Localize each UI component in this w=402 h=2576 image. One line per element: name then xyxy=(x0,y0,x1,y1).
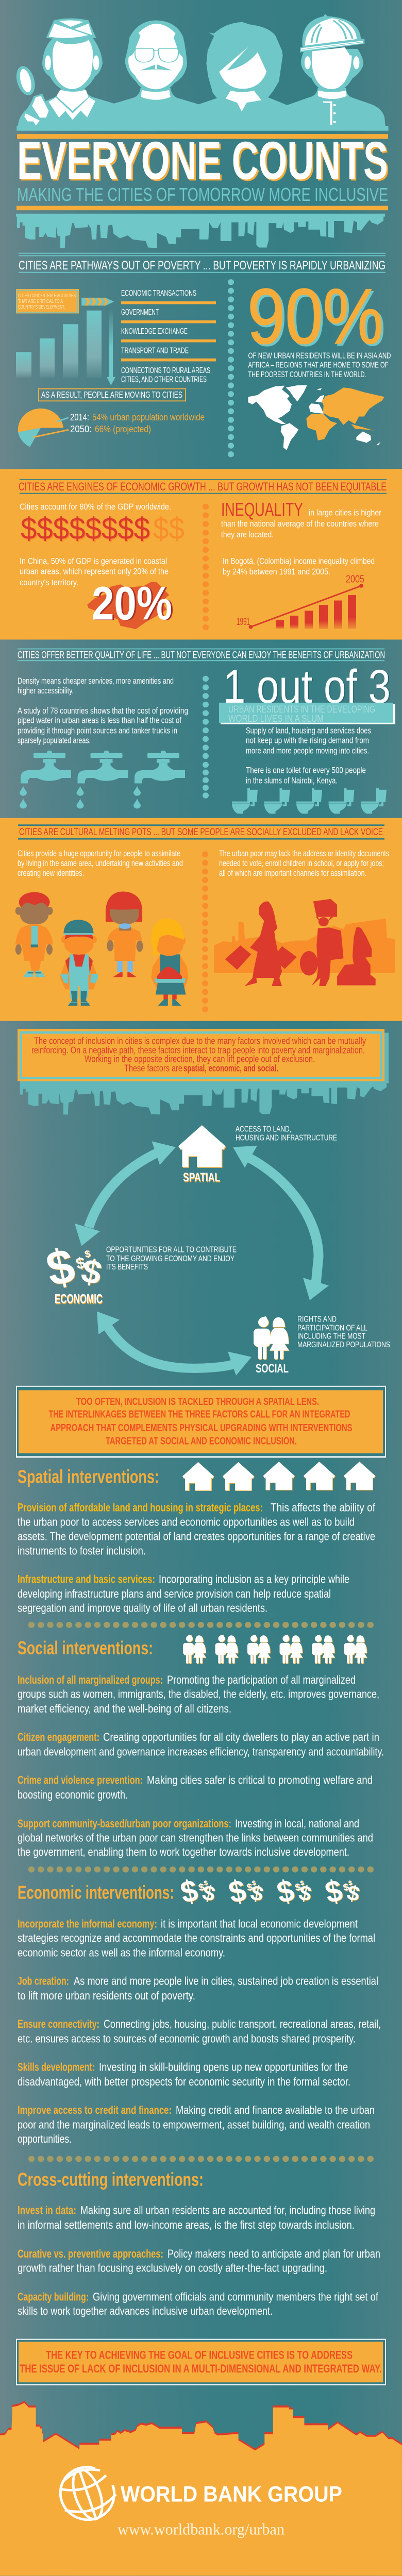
list: activities xyxy=(121,289,216,384)
text: density: sparsely populated areas. xyxy=(18,736,91,745)
text: informal economy: Incorporate the informal economy: xyxy=(18,1918,157,1930)
icons: toilets xyxy=(232,788,387,814)
text: community organizations xyxy=(18,1817,373,1858)
text: China xyxy=(20,556,169,587)
text: capacity building: Capacity building: xyxy=(18,2291,89,2303)
label: social: INCLUDING THE MOST xyxy=(297,1331,365,1341)
callout: spatial lens: TARGETED AT SOCIAL AND ECONOMIC INCLUSION. xyxy=(106,1435,297,1447)
person: man xyxy=(15,892,53,977)
website url: www.worldbank.org/urban xyxy=(118,2520,284,2538)
text: informal economy xyxy=(18,1918,375,1959)
dotted row xyxy=(31,2156,371,2162)
list: activities: KNOWLEDGE EXCHANGE xyxy=(121,327,188,336)
text: density: A study of 78 countries shows that the cost of providing xyxy=(18,706,188,716)
text: job creation: to lift more urban residents out of poverty. xyxy=(18,1990,195,2002)
text: infrastructure: segregation and improve quality of life of all urban residents. xyxy=(18,1602,267,1614)
icons: dollars: $ xyxy=(345,1880,362,1906)
text: curative vs preventive xyxy=(18,2248,380,2275)
callout: cities concentrate activities: THAT ARE CRITICAL TO A xyxy=(18,299,63,304)
illustration: diverse residents xyxy=(15,892,189,1006)
label: economic: ITS BENEFITS xyxy=(106,1262,148,1272)
text: curative vs preventive: growth rather than focusing exclusively on costly after-the-fact upgrading. xyxy=(18,2262,327,2275)
diagram: arrows xyxy=(75,1141,329,1376)
dotted divider xyxy=(228,279,234,457)
text: community organizations: Investing in local, national and xyxy=(235,1817,359,1830)
text: informal economy: it is important that local economic development xyxy=(161,1918,358,1930)
text: Bogota xyxy=(223,556,375,577)
callout: slum: WORLD LIVES IN A SLUM xyxy=(228,713,324,724)
skyline xyxy=(20,1082,387,1114)
text: new urban residents xyxy=(248,351,391,379)
text: invest in data: Invest in data: xyxy=(18,2204,76,2217)
person: woman with fringe xyxy=(206,22,283,112)
arrow: downward xyxy=(107,309,115,385)
text: credit and finance xyxy=(18,2104,375,2145)
icons: dollars: $ xyxy=(225,1873,249,1909)
icon: spatial house xyxy=(178,1125,226,1167)
text: connectivity xyxy=(18,2018,381,2045)
person: man with glasses xyxy=(125,21,187,100)
text: job creation xyxy=(18,1975,378,2002)
text: invest in data xyxy=(18,2204,375,2231)
callout: cities concentrate activities xyxy=(16,290,78,313)
icon: social couple xyxy=(254,1316,289,1360)
dotted divider xyxy=(202,851,208,1012)
text: supply and toilets: There is one toilet for every 500 people xyxy=(246,766,366,775)
illustration: excluded women and city xyxy=(214,899,395,986)
text: supply and toilets: not keep up with the rising demand from xyxy=(246,736,369,745)
callout: people moving xyxy=(39,389,186,401)
text: density: higher accessibility. xyxy=(18,686,74,696)
heading: spatial interventions: Spatial interventions: xyxy=(18,1466,159,1487)
text: marginalized groups: Inclusion of all marginalized groups: xyxy=(18,1673,163,1686)
text: supply and toilets xyxy=(246,726,371,785)
text: connectivity: Ensure connectivity: xyxy=(18,2018,99,2030)
text: infrastructure xyxy=(18,1573,349,1614)
text: density: piped water in urban areas is less than half the cost of xyxy=(18,716,181,725)
text: skills: Skills development: xyxy=(18,2061,95,2073)
icons: dollars: $ xyxy=(197,1882,206,1893)
icons: dollars: $ xyxy=(274,1873,297,1909)
icons: dollars: $ xyxy=(348,1879,353,1887)
text: infrastructure: Incorporating inclusion as a key principle while xyxy=(159,1573,349,1585)
line and bar chart: inequality 1991-2005: 1991 xyxy=(237,616,250,628)
text: infrastructure: Infrastructure and basic services: xyxy=(18,1573,155,1585)
icons: dollars: $ xyxy=(177,1873,201,1909)
label: social xyxy=(256,1314,390,1376)
icons: dollars: $ xyxy=(246,1882,254,1893)
logo text: WORLD BANK GROUP xyxy=(121,2482,342,2506)
text: China: urban areas, which represent only 20% of the xyxy=(20,567,169,576)
icons: houses xyxy=(182,1462,375,1490)
text: density: Density means cheaper services, more amenities and xyxy=(18,676,174,686)
dotted divider xyxy=(203,504,209,630)
callout: spatial lens xyxy=(16,1386,386,1458)
icons: dollars xyxy=(177,1873,362,1909)
dotted row xyxy=(31,1866,371,1873)
text: inequality: they are located. xyxy=(221,530,274,539)
pie chart: urban population: 2050: xyxy=(70,423,92,434)
logo: World Bank globe xyxy=(53,2461,122,2527)
line and bar chart: inequality 1991-2005: 2005 xyxy=(346,573,364,585)
text: citizen engagement xyxy=(18,1731,384,1758)
icons: dollars: $ xyxy=(203,1879,208,1887)
icon: economic dollars: $ xyxy=(74,1253,87,1273)
panel: melting pots xyxy=(0,818,402,1021)
icon: economic dollars: $ xyxy=(83,1248,92,1260)
text: credit and finance: opportunities. xyxy=(18,2133,72,2145)
title block xyxy=(16,130,388,210)
person: girl xyxy=(150,919,189,1006)
callout: key to inclusive cities xyxy=(16,2339,386,2385)
callout: concept of inclusion: spatial, economic, and social. xyxy=(183,1063,278,1073)
text: credit and finance: Improve access to credit and finance: xyxy=(18,2104,172,2116)
text: inequality: INEQUALITY xyxy=(221,499,303,520)
text: Bogota: by 24% between 1991 and 2005. xyxy=(223,567,330,577)
icons: dollars: $ xyxy=(252,1879,257,1887)
list: activities: GOVERNMENT xyxy=(121,308,159,317)
heading: economic interventions: Economic interventions: xyxy=(18,1882,174,1903)
text: affordable land and housing: This affects the ability of xyxy=(271,1501,376,1514)
text: crime prevention xyxy=(18,1774,373,1801)
skyline hanging banner xyxy=(16,214,385,248)
callout: concept of inclusion: Working in the opposite direction, they can lift people out of exclusion. xyxy=(85,1054,315,1064)
text: crime prevention: Crime and violence prevention: xyxy=(18,1774,143,1786)
text: affordable land and housing xyxy=(18,1501,376,1557)
callout: cities concentrate activities: COUNTRY'S DEVELOPMENT. xyxy=(18,304,65,310)
icons: couples xyxy=(183,1635,367,1664)
heading: social interventions: Social interventions: xyxy=(18,1637,153,1658)
icon row: dollars: $$$$$$$$ xyxy=(21,511,150,546)
text: crime prevention: boosting economic growth. xyxy=(18,1788,128,1801)
text: supply and toilets: in the slums of Nairobi, Kenya. xyxy=(246,776,338,785)
icon row: dollars: $$ xyxy=(153,511,185,546)
label: spatial: ACCESS TO LAND, xyxy=(236,1124,291,1133)
text: marginalized groups: market efficiency, and the well-being of all citizens. xyxy=(18,1702,231,1715)
callout: cities concentrate activities: CITIES CONCENTRATE ACTIVITIES xyxy=(18,293,76,299)
icon: economic dollars: $ xyxy=(78,1252,105,1292)
line and bar chart: inequality 1991-2005 xyxy=(237,573,364,629)
label: economic: TO THE GROWING ECONOMY AND ENJOY xyxy=(106,1253,234,1263)
text: citizen engagement: Citizen engagement: xyxy=(18,1731,99,1743)
pie chart: urban population xyxy=(18,409,205,447)
text: GDP: Cities account for 80% of the GDP worldwide. xyxy=(20,502,171,512)
pie chart: urban population: 54% urban population worldwide xyxy=(92,412,205,422)
pie chart: urban population: 66% (projected) xyxy=(95,423,151,434)
label: spatial xyxy=(183,1124,337,1184)
label: spatial: SPATIAL xyxy=(183,1171,220,1184)
icons: dollars: $ xyxy=(200,1880,217,1906)
world map xyxy=(248,385,384,450)
text: affordable land and housing: Provision of affordable land and housing in strategic places: xyxy=(18,1501,263,1514)
icons: dollars: $ xyxy=(294,1882,302,1893)
text: assimilation: by living in the same area, undertaking new activities and xyxy=(18,858,183,868)
text: assimilation xyxy=(18,849,389,878)
text: job creation: Job creation: xyxy=(18,1975,69,1987)
text: inequality: in large cities is higher xyxy=(309,508,381,517)
icon: economic dollars: $ xyxy=(41,1238,79,1297)
label: social: SOCIAL xyxy=(256,1362,289,1376)
label: economic: ECONOMIC xyxy=(55,1292,103,1306)
pie chart: urban population: 2014: xyxy=(70,412,89,422)
callout: concept of inclusion: These factors are xyxy=(124,1063,182,1073)
list: activities: TRANSPORT AND TRADE xyxy=(121,346,189,355)
footer: orange skyline xyxy=(0,2401,402,2576)
text: inequality xyxy=(221,499,381,539)
text: community organizations: Support community-based/urban poor organizations: xyxy=(18,1817,231,1830)
text: capacity building xyxy=(18,2291,379,2317)
text: China: In China, 50% of GDP is generated in coastal xyxy=(20,556,167,566)
label: spatial: HOUSING AND INFRASTRUCTURE xyxy=(236,1133,337,1142)
list: activities: ECONOMIC TRANSACTIONS xyxy=(121,289,196,298)
text: density: providing it through point sources and tanker trucks in xyxy=(18,726,177,736)
text: skills xyxy=(18,2061,350,2088)
callout: slum xyxy=(219,703,395,724)
person: waitress xyxy=(14,19,103,126)
icon: economic dollars xyxy=(41,1238,105,1297)
person: boy in overalls xyxy=(60,920,98,1006)
text: density xyxy=(18,676,188,745)
icons: dollars: $ xyxy=(296,1880,314,1906)
icons: dollars: $ xyxy=(342,1882,350,1893)
label: social: RIGHTS AND xyxy=(297,1314,337,1324)
text: capacity building: skills to work together advances inclusive urban development. xyxy=(18,2305,273,2317)
callout: concept of inclusion xyxy=(18,1029,389,1083)
icons: dollars: $ xyxy=(248,1880,265,1906)
text: informal economy: economic sector as well as the informal economy. xyxy=(18,1946,225,1959)
arrow: chevrons xyxy=(81,298,114,306)
label: economic: OPPORTUNITIES FOR ALL TO CONTRIBUTE xyxy=(106,1245,237,1255)
text: affordable land and housing: instruments to foster inclusion. xyxy=(18,1545,146,1557)
map: China xyxy=(87,582,169,629)
label: social: PARTICIPATION OF ALL xyxy=(297,1323,367,1332)
heading: cross-cutting interventions: Cross-cutting interventions: xyxy=(18,2168,204,2190)
text: marginalized groups xyxy=(18,1673,379,1715)
icons: dollars: $ xyxy=(299,1879,305,1887)
icons: dollars: $ xyxy=(322,1873,345,1909)
text: assimilation: Cities provide a huge opportunity for people to assimilate xyxy=(18,849,180,858)
label: economic xyxy=(55,1245,237,1306)
dotted row xyxy=(31,1622,371,1628)
text: curative vs preventive: Curative vs. preventive approaches: xyxy=(18,2248,163,2260)
text: marginalized groups: Promoting the participation of all marginalized xyxy=(167,1673,356,1686)
list: activities: CITIES, AND OTHER COUNTRIES xyxy=(121,375,207,384)
icons: water taps xyxy=(20,751,185,808)
person: woman xyxy=(106,892,143,977)
person: construction worker xyxy=(300,14,364,125)
text: China: country's territory. xyxy=(20,578,78,587)
illustration: four people silhouettes xyxy=(14,14,389,131)
callout: people moving: AS A RESULT, PEOPLE ARE MOVING TO CITIES xyxy=(41,390,182,400)
list: activities: CONNECTIONS TO RURAL AREAS, xyxy=(121,366,212,375)
bar chart: rising bars xyxy=(16,311,102,378)
panel: engines of growth xyxy=(0,469,402,639)
text: assimilation: creating new identities. xyxy=(18,868,84,878)
big number: 20%: 20% xyxy=(92,577,172,630)
dotted divider xyxy=(203,676,209,799)
